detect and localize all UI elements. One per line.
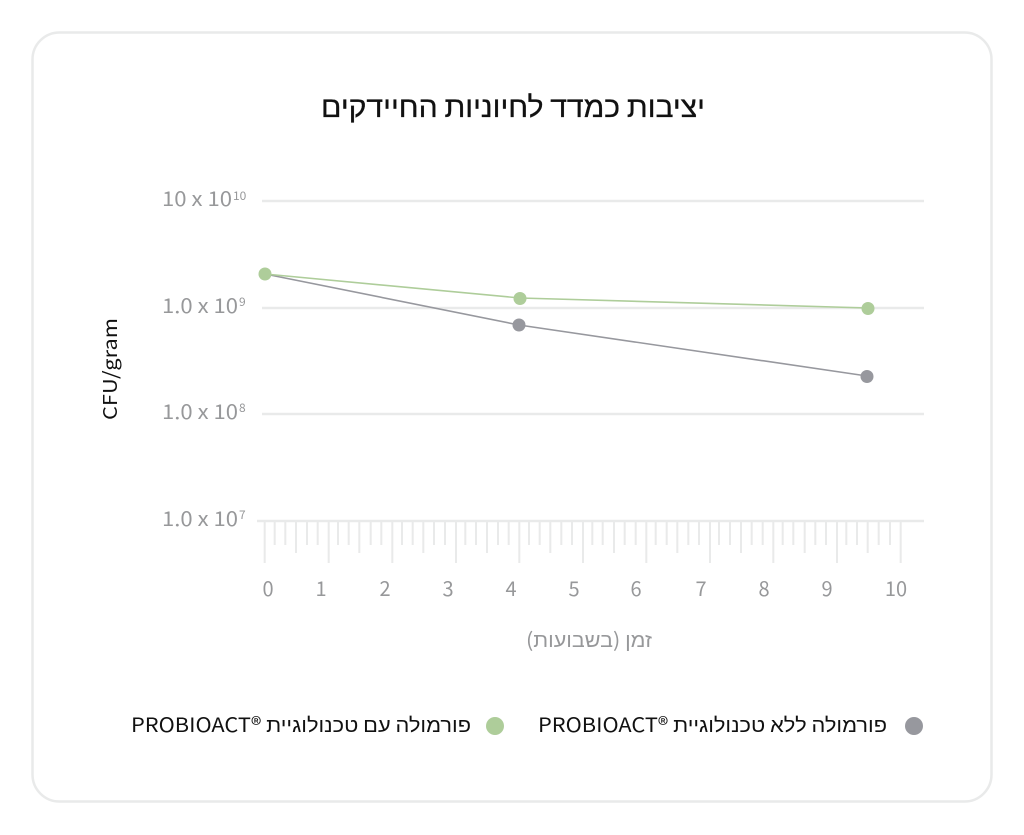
y axis labels: 1.0 x 10: [162, 290, 238, 319]
x axis labels: 2: [379, 573, 391, 602]
y axis labels: 10: [233, 187, 247, 204]
x axis labels: 3: [442, 573, 454, 602]
y axis labels: 9: [239, 293, 246, 310]
legend: with technology: פורמולה עם טכנולוגיית ®PROBIOACT: [131, 709, 471, 738]
y axis labels: 1.0 x 10: [162, 503, 238, 532]
x axis labels: [262, 573, 907, 602]
x axis labels: 5: [568, 573, 580, 602]
legend: without technology: פורמולה ללא טכנולוגיית ®PROBIOACT: [538, 709, 887, 738]
x axis title: זמן (בשבועות): [526, 624, 653, 653]
x axis labels: 9: [821, 573, 833, 602]
line: without technology: [265, 274, 874, 383]
y axis labels: 8: [239, 399, 246, 416]
x axis labels: 0: [262, 573, 274, 602]
y axis labels: 10 x 10: [162, 183, 232, 212]
x axis labels: 10: [885, 573, 907, 602]
x axis labels: 7: [695, 573, 707, 602]
line: with technology: [258, 268, 874, 315]
x axis ruler ticks: [265, 521, 901, 563]
title: יציבות כמדד לחיוניות החיידקים: [321, 84, 705, 126]
x axis labels: 8: [758, 573, 770, 602]
x axis labels: 1: [315, 573, 327, 602]
y axis labels: 1.0 x 10: [162, 396, 238, 425]
grid lines: [257, 201, 924, 521]
x axis labels: 6: [630, 573, 642, 602]
y axis title: CFU/gram: [96, 318, 123, 420]
y axis labels: 7: [239, 506, 246, 523]
x axis labels: 4: [505, 573, 517, 602]
y axis labels: [162, 183, 247, 532]
